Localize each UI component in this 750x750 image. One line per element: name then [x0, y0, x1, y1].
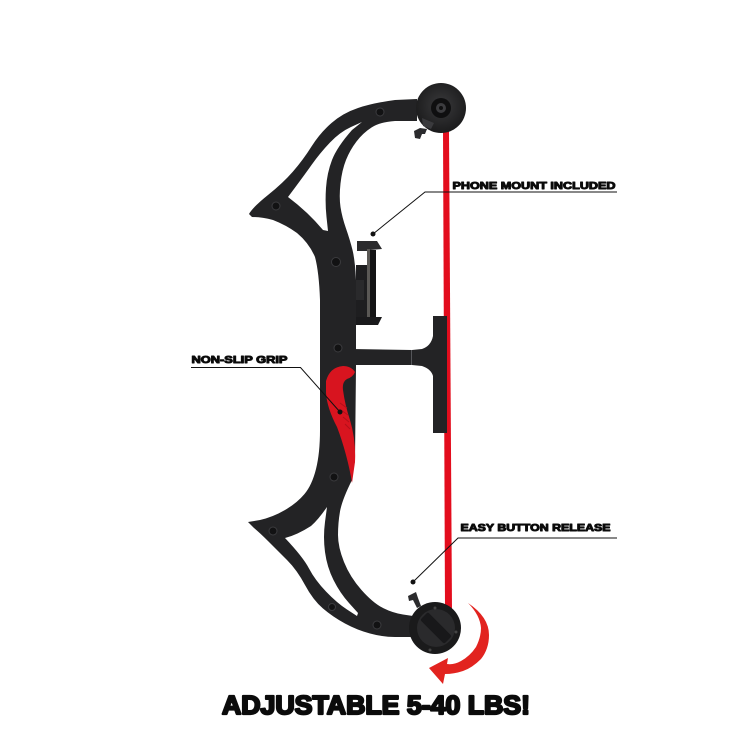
callout: phone mount included: PHONE MOUNT INCLUDED — [452, 180, 616, 192]
stabilizer bar — [352, 316, 447, 433]
callout: non-slip grip: NON-SLIP GRIP — [192, 354, 288, 366]
bow riser and limbs — [248, 99, 417, 637]
phone mount — [352, 241, 382, 325]
headline: ADJUSTABLE 5-40 LBS! — [222, 690, 530, 720]
callout: easy button release: EASY BUTTON RELEASE — [460, 522, 610, 534]
callout: phone mount included — [370, 180, 617, 236]
lower cam wheel — [408, 592, 461, 654]
callout: easy button release — [410, 522, 617, 584]
red rubber grip — [326, 366, 355, 483]
curved red arrow — [429, 603, 489, 684]
callout: non-slip grip — [191, 354, 342, 414]
bolts on limbs — [269, 108, 384, 629]
upper cam wheel — [414, 83, 466, 139]
bow string — [443, 130, 452, 610]
